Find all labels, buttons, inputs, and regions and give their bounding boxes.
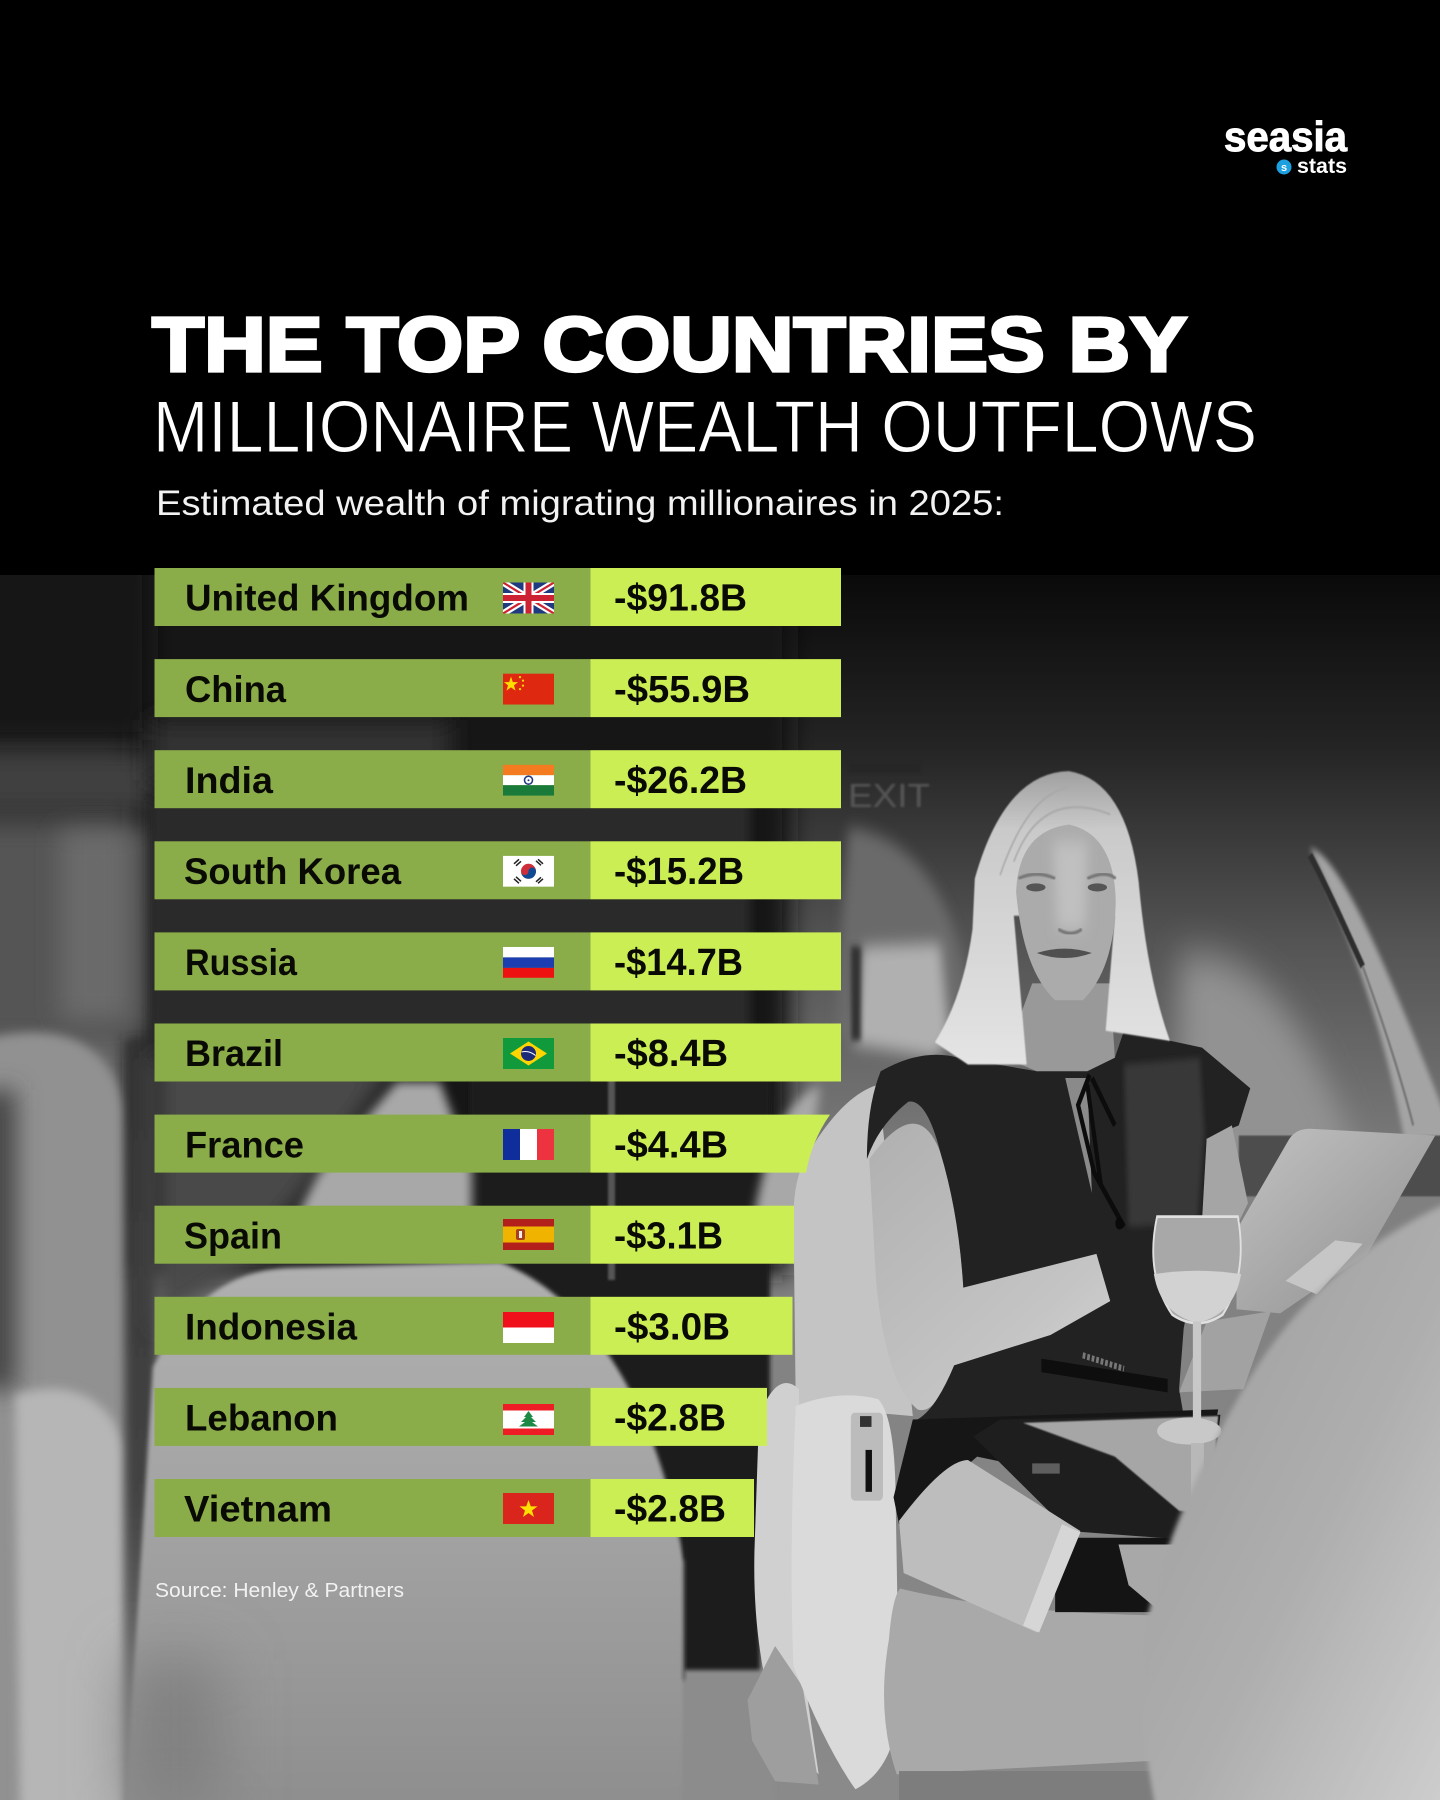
row: Lebanon bbox=[154, 1388, 767, 1446]
face bbox=[1016, 825, 1116, 1000]
row: China: China bbox=[185, 669, 286, 710]
flag: Lebanon bbox=[503, 1404, 554, 1435]
flag: Vietnam bbox=[503, 1493, 554, 1524]
row: Brazil: Brazil bbox=[185, 1033, 283, 1074]
row: Spain: -$3.1B bbox=[614, 1215, 723, 1257]
photo: woman seated on a private jet bbox=[748, 771, 1440, 1800]
logo badge: s bbox=[1281, 162, 1287, 174]
flag: Indonesia bbox=[503, 1312, 554, 1343]
flag: Spain bbox=[503, 1219, 554, 1250]
seat cushion bbox=[884, 1589, 1161, 1774]
row: Indonesia: Indonesia bbox=[185, 1306, 357, 1348]
subtitle: Estimated wealth of migrating millionaires in 2025: bbox=[156, 484, 1004, 523]
row: Vietnam: -$2.8B bbox=[614, 1489, 726, 1531]
flag: UK bbox=[503, 582, 554, 614]
logo sublabel: stats bbox=[1297, 155, 1347, 178]
ranking table bbox=[154, 568, 841, 1537]
row: Spain bbox=[154, 1206, 794, 1264]
row: Russia: Russia bbox=[185, 942, 297, 983]
flag: Russia bbox=[503, 946, 554, 978]
logo wordmark: seasia bbox=[1224, 113, 1348, 160]
row: United Kingdom: United Kingdom bbox=[185, 578, 469, 619]
keyhole and tie bbox=[1065, 1075, 1124, 1229]
row: United Kingdom: -$91.8B bbox=[614, 578, 747, 620]
title bbox=[152, 302, 1257, 468]
wall highlights and window frame bbox=[835, 828, 1440, 1196]
row: France: -$4.4B bbox=[614, 1124, 728, 1166]
title line 2: MILLIONAIRE WEALTH OUTFLOWS bbox=[153, 387, 1257, 468]
row: South Korea bbox=[154, 841, 841, 899]
legs below table bbox=[1118, 1544, 1173, 1606]
row: Lebanon: -$2.8B bbox=[614, 1398, 726, 1440]
wine glass bbox=[1153, 1217, 1241, 1518]
clutch bag bbox=[899, 1460, 1080, 1632]
row: Russia bbox=[154, 932, 841, 990]
row: China: -$55.9B bbox=[614, 669, 750, 711]
tray table bbox=[973, 1311, 1271, 1541]
cabin exit sign: EXIT bbox=[848, 777, 930, 814]
tablet bbox=[1236, 1129, 1435, 1313]
chair back bbox=[793, 1085, 913, 1416]
neck and chest bbox=[1020, 983, 1115, 1072]
hair bbox=[935, 771, 1170, 1065]
flag: China bbox=[503, 674, 554, 704]
dress bbox=[867, 1031, 1250, 1612]
row: India bbox=[154, 750, 841, 808]
row: South Korea: South Korea bbox=[184, 851, 401, 892]
flag: India bbox=[503, 764, 554, 796]
background photo: blurred cabin interior bbox=[0, 540, 1440, 1800]
row: Indonesia: -$3.0B bbox=[614, 1306, 730, 1348]
source note: Source: Henley & Partners bbox=[155, 1580, 404, 1602]
row: United Kingdom bbox=[154, 568, 841, 626]
row: India: -$26.2B bbox=[614, 760, 747, 802]
fingers on tablet bbox=[1286, 1240, 1363, 1294]
foreground seat bbox=[1143, 1200, 1440, 1800]
row: France bbox=[154, 1115, 830, 1173]
row: Russia: -$14.7B bbox=[614, 942, 743, 984]
row: Vietnam bbox=[154, 1479, 754, 1537]
row: South Korea: -$15.2B bbox=[614, 851, 744, 893]
row: Vietnam: Vietnam bbox=[184, 1489, 332, 1530]
armrest and seat side bbox=[748, 1383, 899, 1789]
row: Brazil bbox=[154, 1024, 841, 1082]
row: Lebanon: Lebanon bbox=[185, 1398, 338, 1439]
title line 1: THE TOP COUNTRIES BY bbox=[152, 302, 1187, 388]
row: Indonesia bbox=[154, 1297, 792, 1355]
flag: France bbox=[503, 1129, 554, 1160]
row: China bbox=[154, 659, 841, 717]
logo: seasia stats bbox=[1224, 113, 1348, 178]
right arm bbox=[1202, 1125, 1248, 1227]
left arm bbox=[869, 1124, 1110, 1410]
row: India: India bbox=[185, 760, 273, 801]
row: France: France bbox=[185, 1124, 304, 1165]
row: Spain: Spain bbox=[184, 1215, 282, 1256]
row: Brazil: -$8.4B bbox=[614, 1033, 728, 1075]
flag: Brazil bbox=[503, 1038, 554, 1069]
flag: South Korea bbox=[503, 856, 554, 887]
